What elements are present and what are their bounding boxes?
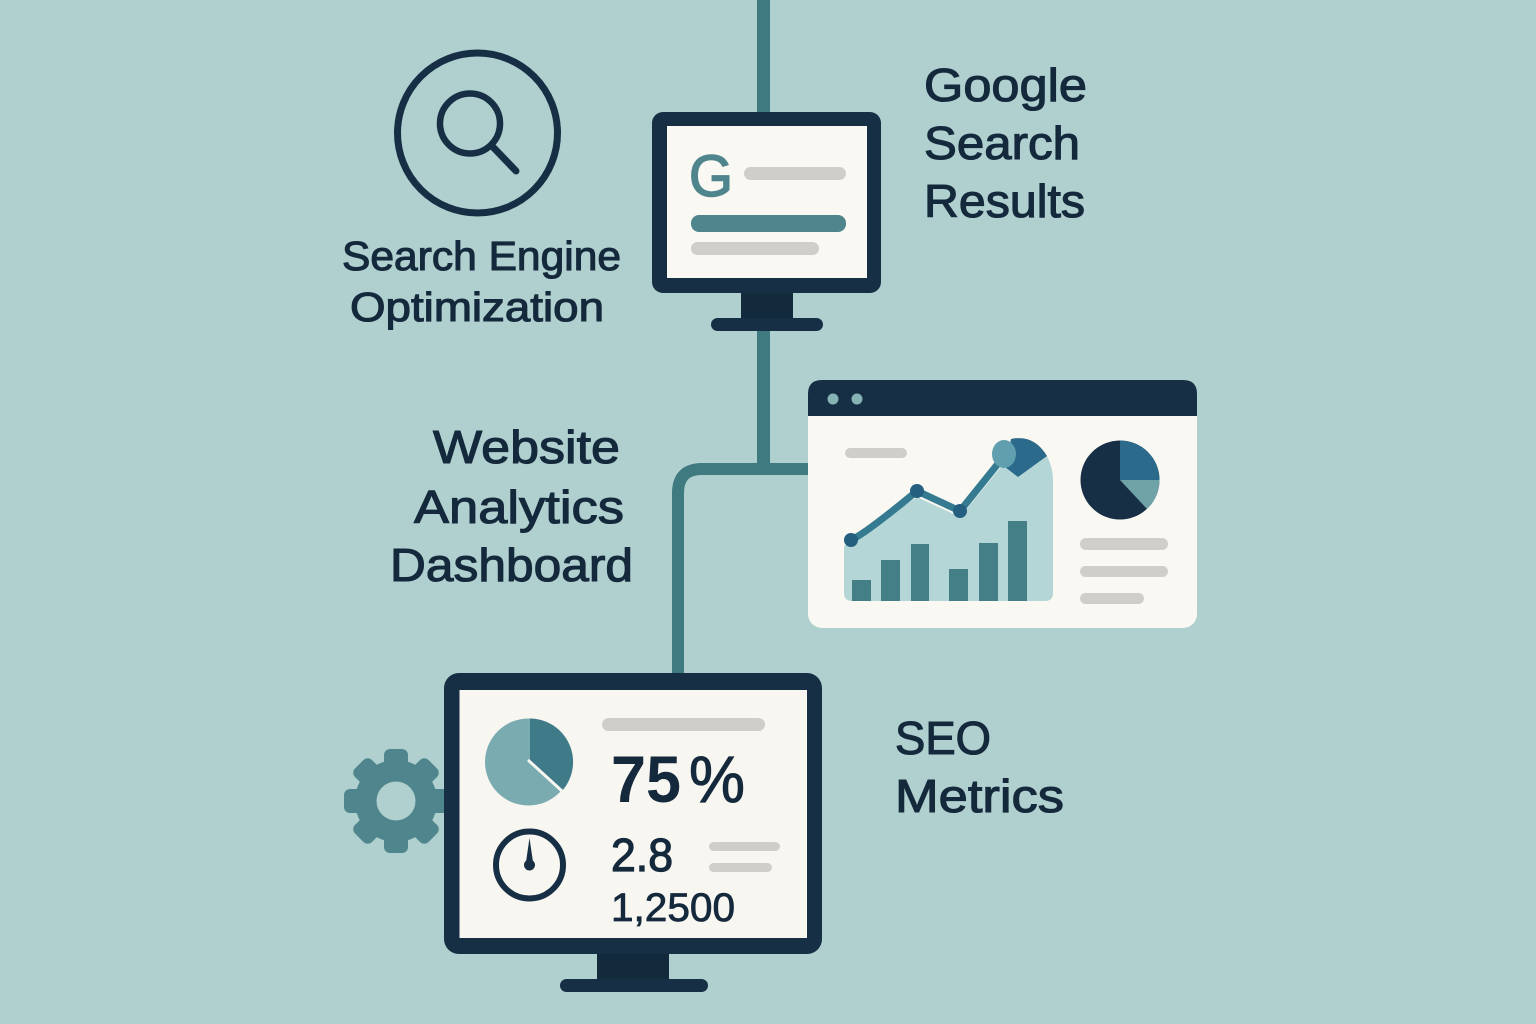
icon: Google G: G <box>689 144 733 209</box>
connector lines <box>678 0 812 678</box>
heading: Website Analytics Dashboard <box>390 421 633 591</box>
metric: 75%: 75 <box>611 742 681 816</box>
metric: 1,2500: 1,2500 <box>611 886 735 930</box>
heading: Website Analytics Dashboard: Dashboard <box>390 539 633 591</box>
heading: SEO Metrics <box>895 712 1064 822</box>
pie chart <box>485 718 573 806</box>
panel: SEO metrics monitor <box>444 673 822 992</box>
icon: gauge <box>496 832 563 898</box>
heading: Google Search Results: Results <box>924 175 1085 227</box>
heading: SEO Metrics: SEO <box>895 712 991 764</box>
heading: Search Engine Optimization: Optimization <box>350 284 604 330</box>
heading: Google Search Results: Search <box>924 117 1080 169</box>
panel: Google search monitor <box>652 112 881 331</box>
pie chart <box>1080 440 1160 520</box>
heading: Search Engine Optimization: Search Engine <box>342 233 621 279</box>
heading: Website Analytics Dashboard: Website <box>433 421 620 473</box>
metric: 75% <box>611 742 745 816</box>
heading: Google Search Results: Google <box>924 59 1087 111</box>
icon: search engine magnifier <box>398 53 558 213</box>
line and bar chart <box>844 438 1053 601</box>
heading: Website Analytics Dashboard: Analytics <box>414 481 624 533</box>
heading: Google Search Results <box>924 59 1087 227</box>
icon: gear <box>344 749 448 853</box>
heading: Search Engine Optimization <box>342 233 621 330</box>
metric: 2.8: 2.8 <box>611 829 673 881</box>
panel: analytics dashboard window <box>808 380 1197 628</box>
metric: 75%: % <box>689 742 745 816</box>
heading: SEO Metrics: Metrics <box>895 770 1064 822</box>
